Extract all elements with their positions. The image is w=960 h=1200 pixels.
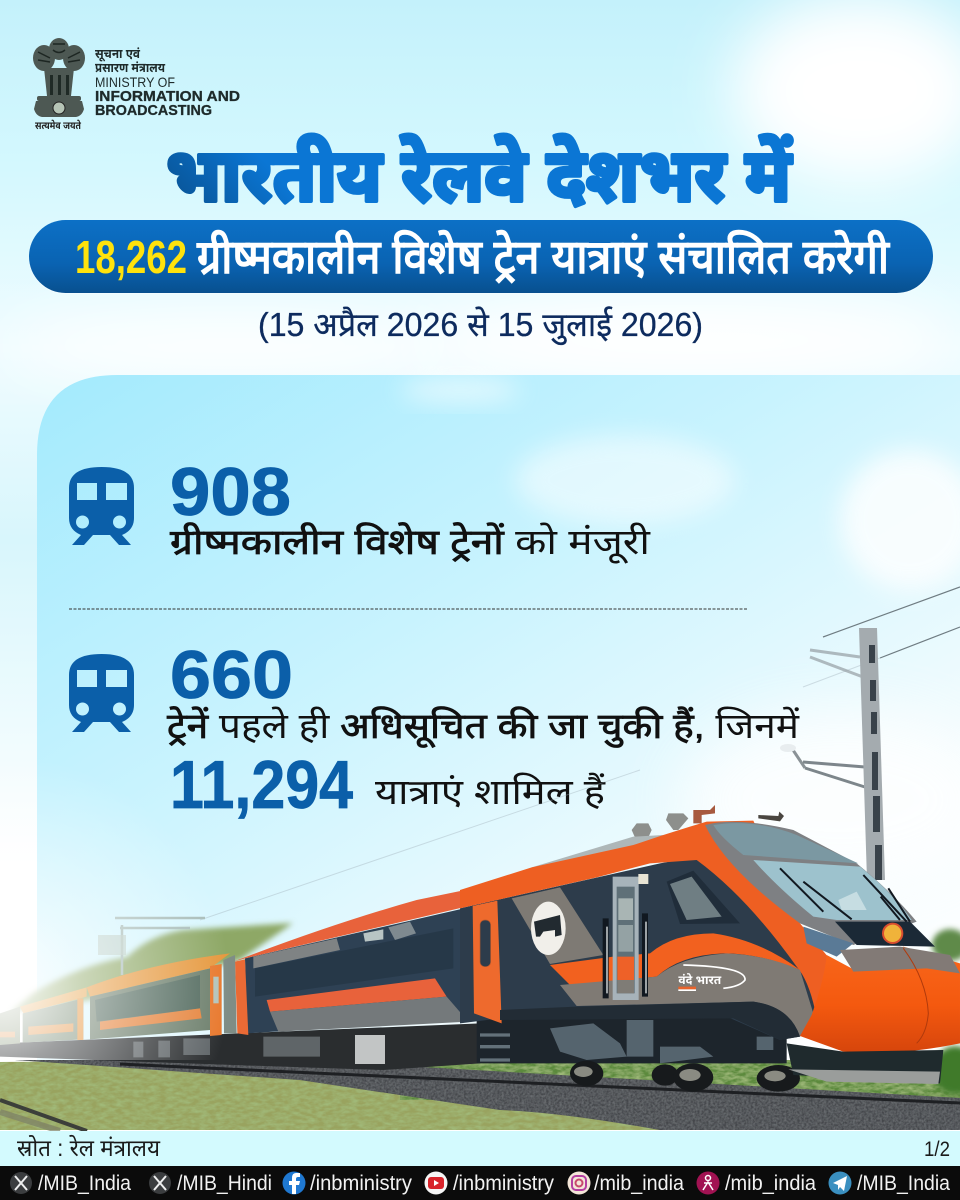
second carriage [245,907,473,1033]
stat: 660 notified trains [69,637,800,823]
social media bar: /mib_india [725,1172,816,1195]
train: lead carriage [460,805,960,1092]
wheels [570,1061,800,1092]
logo: Ministry of Information and Broadcasting: BROADCASTING [95,103,212,119]
side door [613,877,639,1000]
nose orange [800,947,960,1053]
icon: YouTube [424,1172,448,1194]
roof equipment [632,805,784,845]
logo: Ministry of Information and Broadcasting: सत्यमेव जयते [35,119,82,132]
icon: train [69,654,134,732]
icon: X second [149,1172,171,1194]
train: lead carriage: वंदे भारत [678,972,722,987]
logo: Ministry of Information and Broadcasting: सूचना एवं [95,46,141,62]
logo: Ministry of Information and Broadcasting: MINISTRY OF [95,74,175,90]
grey lower livery [560,953,813,1037]
vande bharat logo [683,965,745,988]
icon: national emblem [33,38,85,117]
lower windscreen [753,860,912,920]
icon: Facebook [282,1172,306,1194]
number: 908 [170,454,291,530]
sun glare [0,755,230,1060]
logo roundel [531,902,566,955]
banner text: ग्रीष्मकालीन विशेष ट्रेन यात्राएं संचालित करेगी [197,230,890,283]
canopy frame [705,822,917,945]
under skirt [500,1002,800,1040]
grey chin [840,947,960,973]
social media bar: /inbministry [310,1172,412,1195]
dash panel [835,922,935,947]
journeys description: यात्राएं शामिल हैं [375,772,607,812]
orange swoosh livery [550,933,800,985]
logo: Ministry of Information and Broadcasting: INFORMATION AND [95,89,240,105]
social media bar: /inbministry [453,1172,554,1195]
social media bar: /mib_india [594,1172,684,1195]
description: ग्रीष्मकालीन विशेष ट्रेनों को मंजूरी [170,522,651,564]
cab window [667,871,740,924]
headlight [803,927,853,957]
panel: statistics background [37,375,960,1130]
date range: (15 अप्रैल 2026 से 15 जुलाई 2026) [258,305,703,345]
cab door [473,901,502,1023]
train: rear carriages [0,888,480,1070]
banner: headline pill [29,220,933,294]
page number: 1/2 [924,1138,950,1161]
undercarriage [477,1017,787,1063]
body silhouette [460,857,830,1040]
logo: Ministry of Information and Broadcasting: प्रसारण मंत्रालय [95,60,166,75]
icon: Telegram [828,1172,852,1194]
fourth carriage [20,987,87,1013]
icon: Koo [696,1172,720,1194]
wipers [780,868,910,922]
title: भारतीय रेलवे देशभर में [166,134,793,217]
pilot plow [787,1043,943,1083]
icon: X [10,1172,32,1194]
number: 660 [170,637,293,713]
undercarriage [0,1023,480,1070]
number: journeys: 11,294 [170,747,353,823]
logo: Ministry of Information and Broadcasting [33,38,240,132]
banner number: 18,262 [75,231,187,283]
trackside ground [0,929,960,1131]
icon: Instagram [568,1172,590,1194]
overhead electric pole and wires [200,587,960,920]
social media bar: /MIB_India [857,1172,950,1195]
social media bar [0,1166,960,1200]
social media bar: /MIB_Hindi [177,1172,272,1195]
orange roof and nose shell [460,821,831,1010]
background hill [10,918,293,1012]
social media bar: /MIB_India [38,1172,131,1195]
icon: train [69,467,134,545]
ballast [15,1060,960,1130]
source strip [0,1131,960,1166]
third carriage [87,953,230,997]
upper windscreen [713,823,858,863]
source: स्रोत : रेल मंत्रालय [17,1135,161,1161]
fifth carriage [0,1007,20,1045]
stat: 908 approved trains [69,454,651,564]
grey diagonal livery [512,887,603,964]
description: ट्रेनें पहले ही अधिसूचित की जा चुकी हैं, जिनमें [167,706,800,748]
